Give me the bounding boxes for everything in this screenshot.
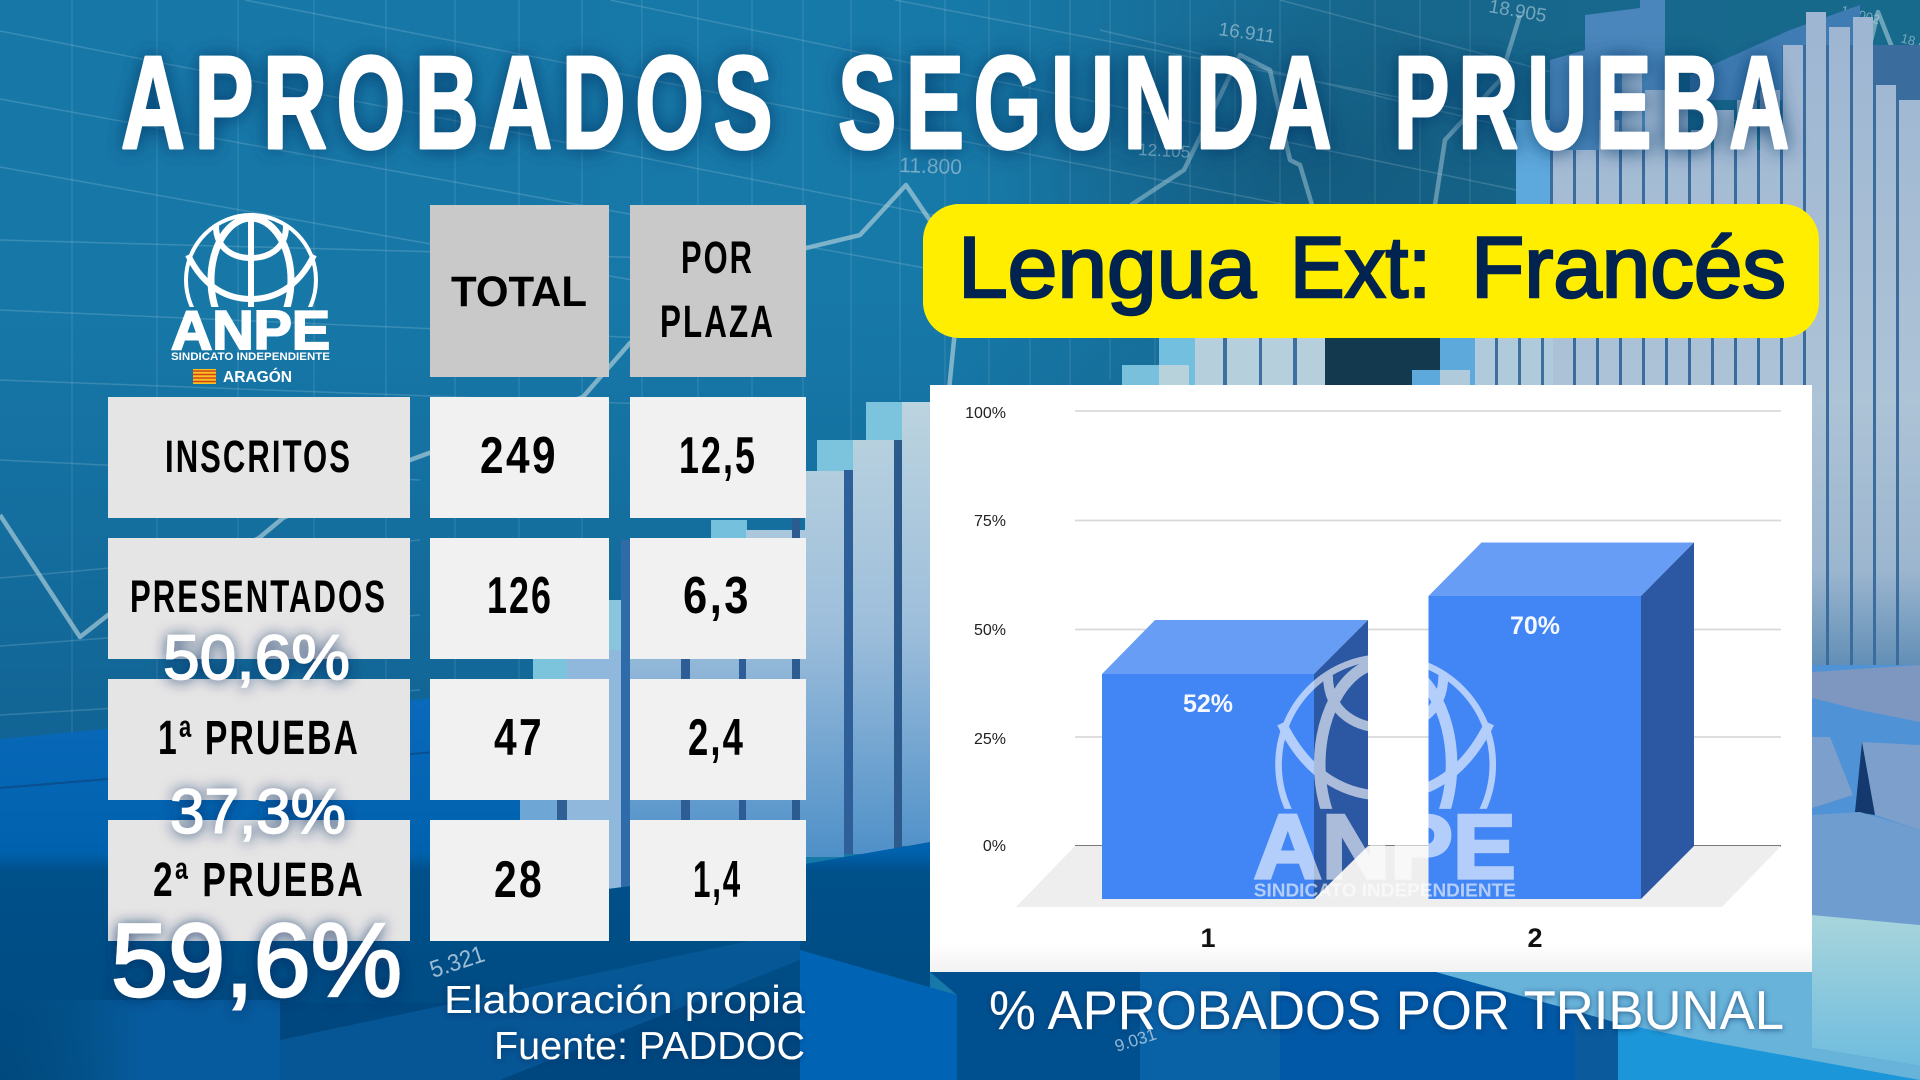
chart x axis labels — [1200, 923, 1543, 953]
background floor — [0, 690, 1920, 1080]
banner text: Lengua — [958, 220, 1256, 316]
watermark: ANPE logo: SINDICATO INDEPENDIENTE — [1254, 880, 1516, 900]
chart y axis labels: 0% — [983, 838, 1006, 855]
title: SEGUNDA — [838, 29, 1341, 176]
chart caption: % APROBADOS POR TRIBUNAL — [989, 979, 1784, 1041]
chart x axis labels: 2 — [1527, 923, 1543, 953]
percentage: 2a prueba: 59,6% — [111, 903, 402, 1019]
header: por plaza — [630, 205, 806, 377]
table — [108, 205, 806, 941]
row: inscritos: INSCRITOS — [165, 431, 352, 482]
chart floor — [1016, 846, 1781, 907]
background line graph — [0, 12, 1920, 637]
bar: tribunal 1: 52% — [1183, 690, 1233, 718]
header: por plaza: POR — [681, 232, 754, 283]
chart y axis labels: 75% — [974, 513, 1006, 530]
banner text: Francés — [1471, 220, 1786, 316]
logo: ANPE Aragón — [171, 213, 330, 386]
row: 2a prueba: 1,4 — [693, 851, 742, 909]
background small figures — [899, 0, 1920, 179]
watermark: ANPE logo — [1254, 657, 1516, 900]
logo wordmark: ANPE — [171, 299, 330, 361]
bar: tribunal 2: 70% — [1510, 612, 1560, 640]
row: presentados — [108, 538, 806, 659]
header: por plaza: PLAZA — [660, 296, 775, 347]
percentage: presentados: 50,6% — [163, 623, 350, 693]
background figure 5.321: 5.321 — [427, 941, 488, 984]
chart y axis labels: 50% — [974, 622, 1006, 639]
logo tagline: SINDICATO INDEPENDIENTE — [171, 351, 330, 363]
background small figures: 11.800 — [899, 154, 962, 179]
row: inscritos: 249 — [480, 427, 558, 485]
row: 1a prueba: 1ª PRUEBA — [158, 712, 360, 765]
banner text: Ext: — [1290, 220, 1431, 316]
background figure 9.031: 9.031 — [1112, 1025, 1159, 1056]
bar: tribunal 2 — [1428, 542, 1694, 899]
header: total — [430, 205, 609, 377]
chart y axis labels: 100% — [965, 405, 1006, 422]
subject banner — [923, 204, 1819, 338]
title — [121, 29, 1798, 176]
watermark: ANPE logo: ANPE — [1254, 797, 1516, 898]
percentage: 1a prueba: 37,3% — [170, 777, 346, 847]
background bars under the yellow banner — [1122, 338, 1553, 388]
chart y axis labels — [965, 405, 1006, 855]
background small figures: 19.002 — [1839, 2, 1882, 27]
row: presentados: 6,3 — [683, 567, 751, 625]
chart x axis labels: 1 — [1200, 923, 1216, 953]
icon: Aragón flag — [193, 369, 216, 384]
bar: tribunal 1 — [1102, 620, 1368, 899]
row: 1a prueba — [108, 679, 806, 800]
row: 1a prueba: 47 — [494, 709, 544, 767]
title: APROBADOS — [121, 29, 782, 176]
background right discs — [1812, 665, 1920, 1066]
background small figures: 12.105 — [1138, 140, 1191, 162]
background right bars — [1516, 0, 1920, 680]
row: presentados: 126 — [487, 567, 553, 625]
row: 2a prueba — [108, 820, 806, 941]
row: inscritos — [108, 397, 806, 518]
row: 2a prueba: 2ª PRUEBA — [153, 854, 365, 907]
panel: bar chart — [930, 385, 1812, 972]
source note: Elaboración propia — [444, 979, 805, 1022]
row: 2a prueba: 28 — [494, 851, 544, 909]
background centre bars — [518, 402, 932, 920]
logo region: ARAGÓN — [223, 367, 292, 386]
source note — [444, 979, 805, 1068]
row: 1a prueba: 2,4 — [688, 709, 745, 767]
chart y axis labels: 25% — [974, 731, 1006, 748]
source note: Fuente: PADDOC — [494, 1025, 805, 1068]
header: total: TOTAL — [451, 268, 587, 316]
banner text — [958, 220, 1786, 316]
background small figures: 16.911 — [1217, 19, 1276, 48]
row: presentados: PRESENTADOS — [130, 571, 387, 622]
row: inscritos: 12,5 — [679, 427, 757, 485]
icon: globe — [184, 213, 318, 307]
chart gridlines — [1075, 411, 1781, 846]
